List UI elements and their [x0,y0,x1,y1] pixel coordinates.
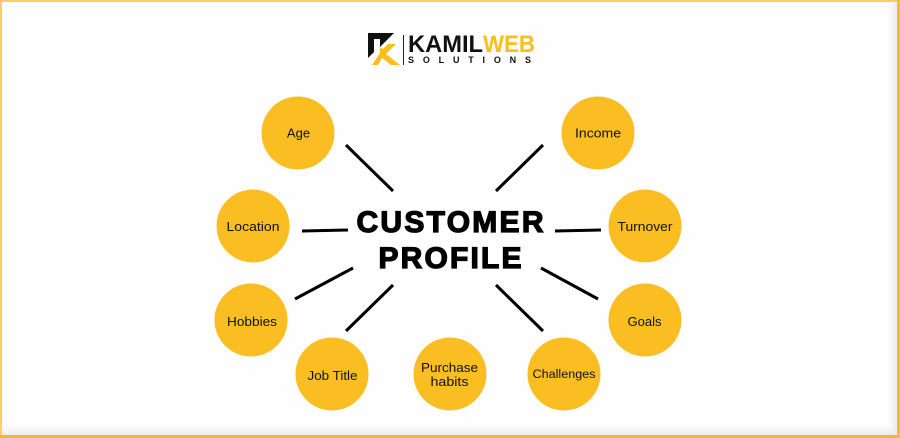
logo tagline: SOLUTIONS [408,55,531,65]
title: CUSTOMER [356,206,544,239]
node: Goals [608,284,682,356]
node: Turnover [608,190,682,262]
connector lines [295,145,601,331]
node: Goals: Goals [628,314,662,329]
node: Age [262,96,334,170]
node: Hobbies: Hobbies [227,314,278,329]
node: Turnover: Turnover [618,219,673,234]
node: Challenges: Challenges [532,369,596,381]
node: Purchase habits: Purchase [421,360,478,375]
node: Challenges [528,338,600,410]
title: PROFILE [378,242,522,275]
node: Hobbies [214,284,288,356]
node: Income: Income [575,126,621,140]
node: Purchase habits [414,338,486,410]
logo: WEB [483,31,535,58]
node: Location: Location [226,219,280,234]
icon: K mark [368,33,400,65]
logo wordmark: KAMIL [408,31,483,58]
node: Job Title [296,338,368,410]
node: Location [216,190,290,262]
node: Purchase habits: habits [430,374,469,389]
logo [368,31,535,65]
node: Age: Age [287,126,310,140]
node: Job Title: Job Title [308,368,358,383]
node: Income [562,96,634,170]
title [356,206,544,275]
